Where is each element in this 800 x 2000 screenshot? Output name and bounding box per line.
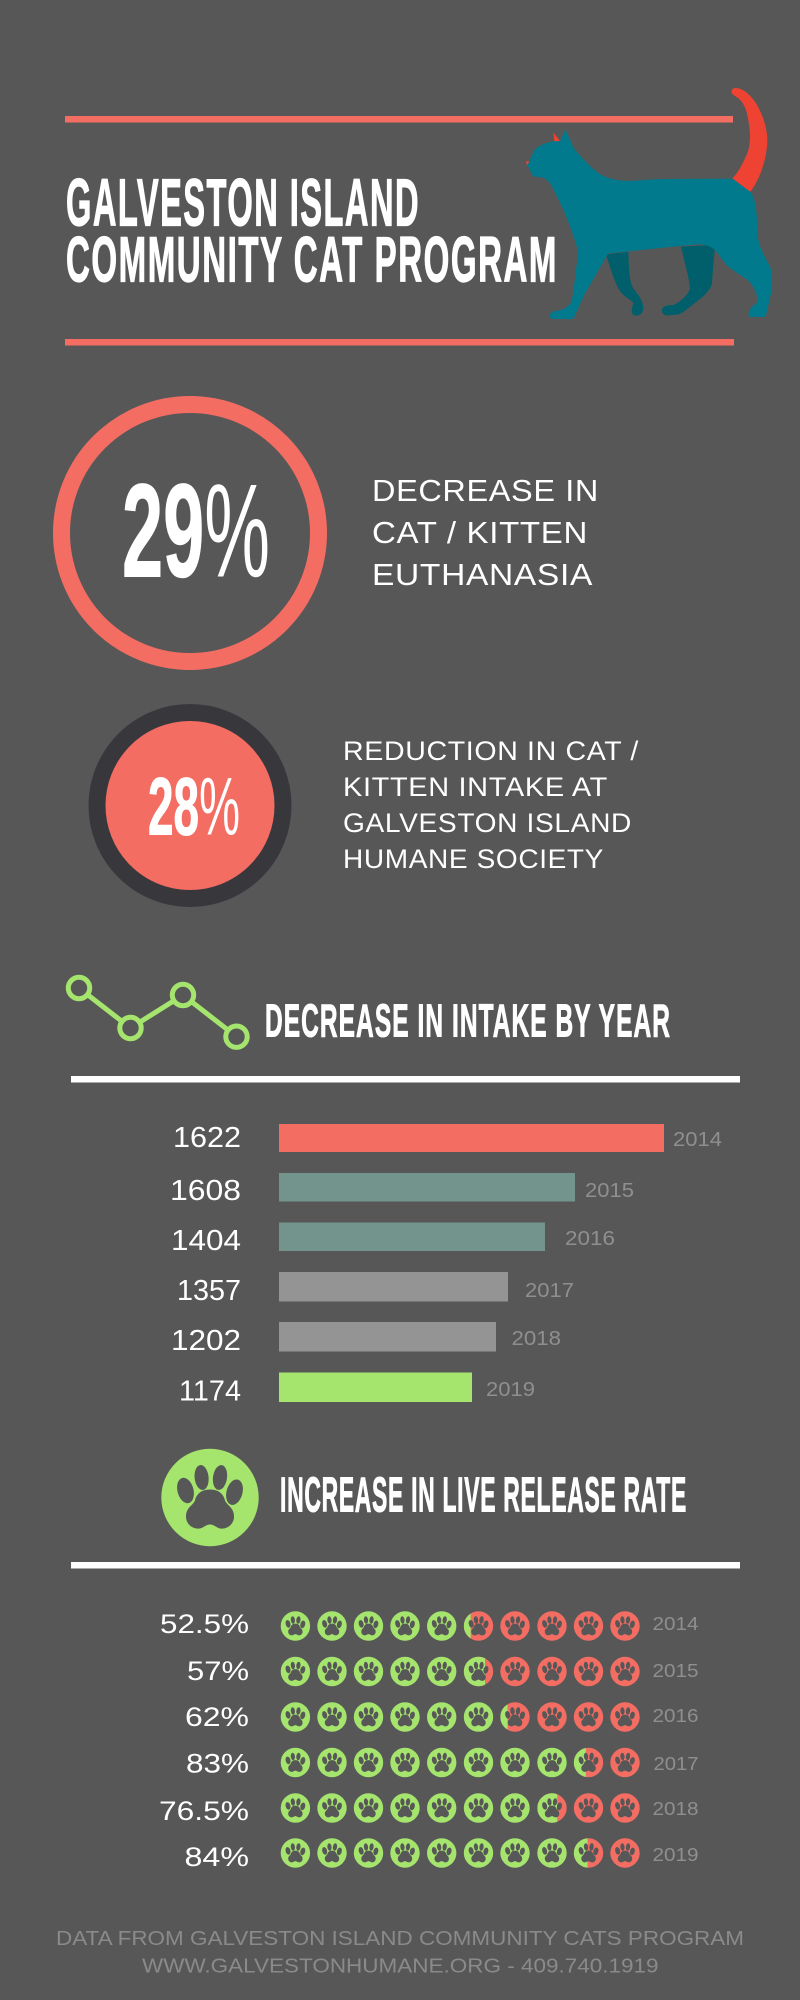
row 2014: 2014	[673, 1128, 722, 1151]
row 2019: 2019	[486, 1378, 535, 1401]
bottom rule	[65, 339, 734, 346]
row 2016: 2016	[652, 1705, 698, 1726]
row 2015	[187, 1656, 698, 1686]
title: GALVESTON ISLAND	[66, 166, 420, 240]
text: intake: REDUCTION IN CAT /	[343, 736, 639, 766]
row 2015: 2015	[652, 1660, 698, 1681]
icon: line chart	[68, 977, 247, 1047]
pictogram chart: live release rate	[159, 1609, 698, 1872]
stat: 29%	[62, 404, 318, 662]
row 2017	[177, 1272, 574, 1307]
ring	[62, 404, 318, 662]
divider	[71, 1562, 740, 1568]
divider	[71, 1076, 740, 1082]
value: 28%	[148, 762, 240, 852]
row 2019: 1174	[179, 1376, 241, 1408]
row 2017: 83%	[186, 1748, 249, 1778]
title	[66, 166, 558, 295]
row 2019	[186, 1838, 698, 1868]
text: intake	[343, 736, 639, 874]
text: euthanasia	[372, 474, 599, 592]
row 2019	[179, 1372, 535, 1408]
text: intake: KITTEN INTAKE AT	[343, 772, 608, 802]
row 2016: 1404	[171, 1225, 241, 1257]
row 2015: 1608	[170, 1175, 241, 1207]
row 2018	[171, 1322, 561, 1357]
row 2018: 1202	[171, 1325, 241, 1357]
row 2018: 2018	[512, 1327, 561, 1350]
row 2019: 84%	[184, 1842, 249, 1872]
row 2015	[170, 1173, 634, 1207]
row 2015: 57%	[187, 1656, 249, 1686]
text: intake: GALVESTON ISLAND	[343, 808, 632, 838]
footer	[56, 1928, 744, 1977]
text: euthanasia: EUTHANASIA	[372, 558, 593, 592]
row 2016: 2016	[565, 1227, 615, 1250]
ring and disc	[97, 712, 283, 898]
value: 29%	[122, 458, 270, 606]
row 2018: 2018	[652, 1798, 698, 1819]
row 2017: 2017	[654, 1753, 698, 1774]
text: euthanasia: DECREASE IN	[372, 474, 599, 508]
row 2017	[186, 1748, 698, 1778]
row 2016	[185, 1702, 698, 1732]
row 2014	[173, 1122, 722, 1154]
row 2017: 2017	[525, 1279, 574, 1302]
row 2018	[159, 1793, 698, 1826]
icon: paw badge	[161, 1449, 259, 1546]
row 2014: 1622	[173, 1122, 241, 1154]
text: euthanasia: CAT / KITTEN	[372, 516, 588, 550]
row 2015: 2015	[585, 1179, 634, 1202]
row 2014: 2014	[652, 1613, 698, 1634]
footer: DATA FROM GALVESTON ISLAND COMMUNITY CATS PROGRAM	[56, 1928, 744, 1950]
row 2016: 62%	[185, 1702, 249, 1732]
row 2019: 2019	[652, 1844, 698, 1865]
text: intake: HUMANE SOCIETY	[343, 844, 604, 874]
stat: 28%	[97, 712, 283, 898]
bar chart: intake by year	[170, 1122, 722, 1408]
row 2014	[160, 1609, 698, 1641]
row 2017: 1357	[177, 1275, 241, 1307]
footer: WWW.GALVESTONHUMANE.ORG - 409.740.1919	[142, 1955, 658, 1977]
row 2014: 52.5%	[160, 1609, 249, 1639]
icon: cat	[526, 88, 772, 319]
top rule	[65, 116, 733, 122]
row 2018: 76.5%	[159, 1796, 249, 1826]
row 2016	[171, 1222, 615, 1257]
